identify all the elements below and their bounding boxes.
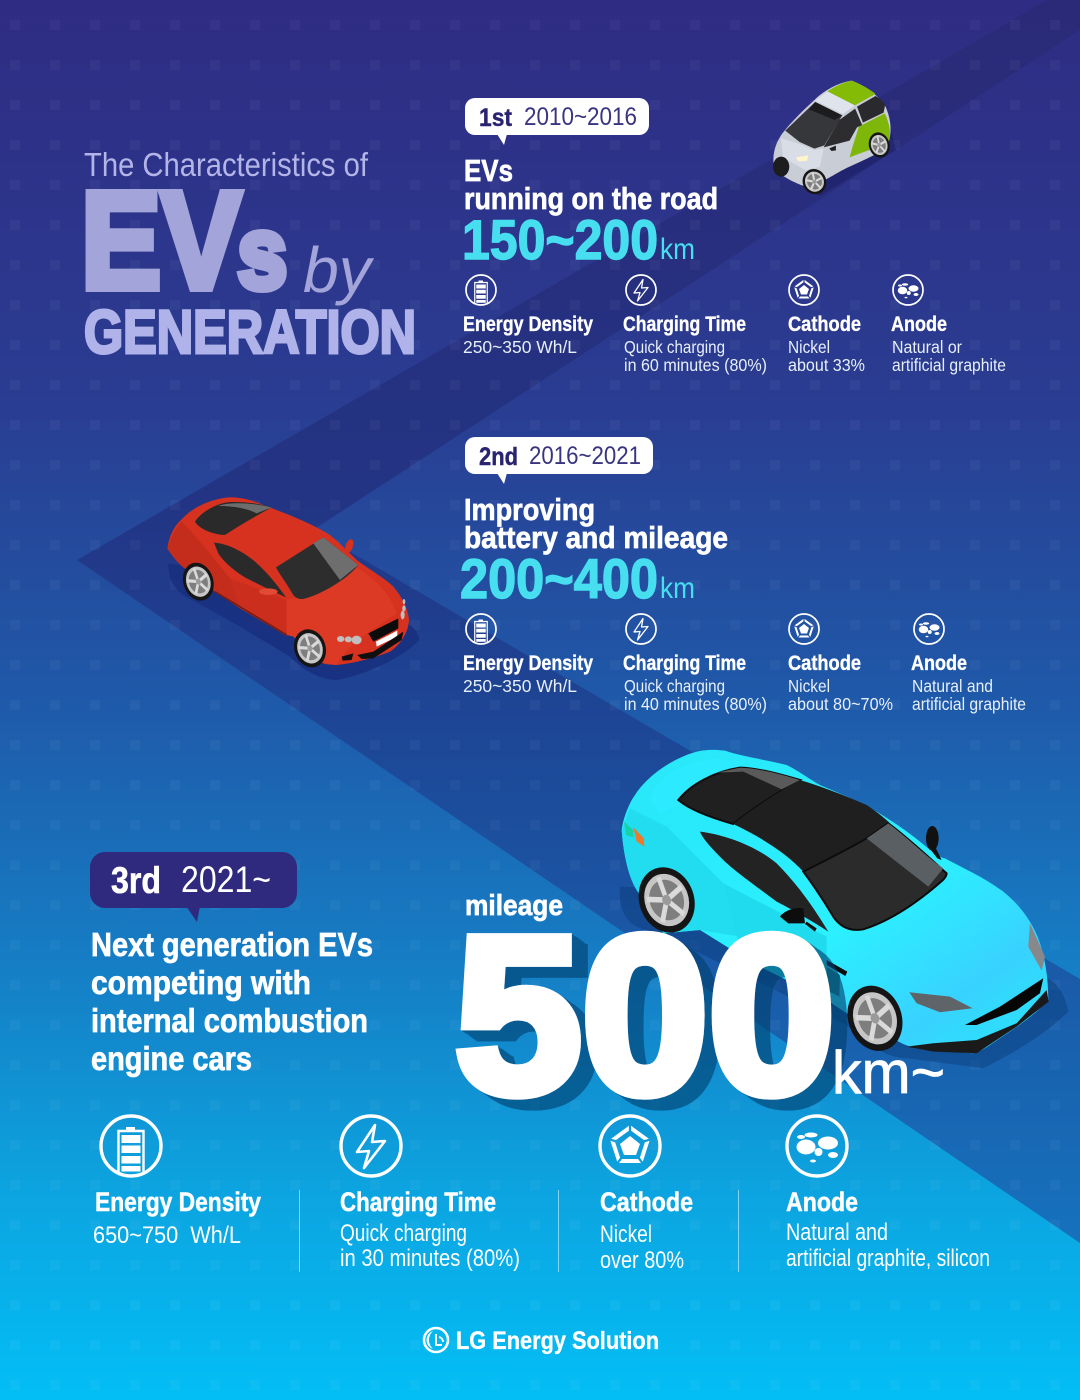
speech bubble: 3rd 2021~: 2021~ [181,859,271,900]
spec: charging time: in 40 minutes (80%) [624,694,767,714]
spec: cathode [788,313,865,375]
logo: LG Energy Solution: LG Energy Solution [456,1327,659,1355]
spec: cathode: Nickel [600,1221,652,1248]
spec: charging time: Charging Time [340,1187,496,1217]
speech bubble: 1st 2010~2016: 1st [479,104,513,132]
icon: pentagon cathode [600,1116,660,1176]
spec: anode [786,1187,990,1272]
spec: anode: Anode [891,313,947,336]
icon: battery [101,1116,161,1176]
spec: cathode: over 80% [600,1247,684,1274]
spec: energy density: Energy Density [463,652,593,675]
spec: charging time: Charging Time [623,652,746,675]
spec: anode: Anode [911,652,967,675]
spec: charging time: in 60 minutes (80%) [624,355,767,375]
heading: running on the road [464,181,718,216]
spec: energy density: 250~350 Wh/L [463,337,577,357]
spec: anode: Natural and [786,1219,888,1246]
logo mark [424,1328,448,1352]
heading: internal combustion [91,1002,368,1039]
panel: 2nd generation [460,437,1026,714]
spec: charging time: in 30 minutes (80%) [340,1245,520,1272]
spec: cathode [600,1187,693,1274]
title: by: by [303,234,375,306]
spec: anode: artificial graphite, silicon [786,1245,990,1272]
icon: graphite anode [787,1116,847,1176]
illustration: small green and silver city car [773,81,896,196]
title: EVs: EV [81,164,241,318]
spec: cathode: Nickel [788,337,830,357]
spec: cathode: Cathode [600,1187,693,1217]
heading: battery and mileage [464,520,728,555]
heading: engine cars [91,1040,252,1077]
speech bubble: 3rd 2021~: 3rd [111,860,161,901]
title: EVs: s [238,196,287,310]
spec: charging time [340,1187,520,1272]
panel: 3rd generation [90,852,990,1274]
spec: anode: Natural or [892,337,962,357]
panel: 1st generation [462,98,1006,375]
big number: 500: 500 [455,891,835,1140]
spec: energy density [93,1187,261,1249]
spec: charging time [623,652,767,714]
heading: Next generation EVs [91,926,373,963]
mileage figure: km [660,572,695,605]
unit: km~: km~ [832,1039,945,1106]
spec: anode [911,652,1026,714]
spec: charging time: Quick charging [340,1220,467,1247]
icon: battery [466,614,496,644]
heading: EVs [464,153,513,188]
heading [464,492,728,555]
spec: cathode: Cathode [788,313,861,336]
spec: cathode: Nickel [788,676,830,696]
illustration: red coupe [167,497,419,680]
title line: The Characteristics of: The Characteristics of [84,146,369,183]
spec: anode [891,313,1006,375]
speech bubble: 1st 2010~2016 [465,98,649,145]
spec: cathode: Cathode [788,652,861,675]
speech bubble: 2nd 2016~2021 [465,437,653,484]
spec: charging time: Quick charging [624,676,725,696]
icon: lightning bolt [341,1116,401,1176]
heading [91,926,373,1077]
spec: energy density: Energy Density [95,1187,261,1217]
speech bubble: 3rd 2021~ [90,852,297,922]
icon: pentagon cathode [789,275,819,305]
spec: anode: artificial graphite [912,694,1026,714]
speech bubble: 2nd 2016~2021: 2016~2021 [529,442,641,470]
icon: graphite anode [893,275,923,305]
icon: battery [466,275,496,305]
heading: competing with [91,964,311,1001]
spec: cathode: about 80~70% [788,694,893,714]
spec: cathode: about 33% [788,355,865,375]
spec: charging time: Charging Time [623,313,746,336]
title [81,146,416,366]
spec: energy density [463,313,593,357]
spec: anode: Anode [786,1187,858,1217]
heading: Improving [464,492,595,527]
icon: pentagon cathode [789,614,819,644]
spec: energy density: Energy Density [463,313,593,336]
illustration: cyan sports car [620,750,1068,1068]
spec: charging time [623,313,767,375]
mileage figure: km [660,233,695,266]
heading [464,153,718,216]
speech bubble: 2nd 2016~2021: 2nd [479,443,518,471]
spec: anode: Natural and [912,676,993,696]
spec: energy density [463,652,593,696]
mileage figure: 200~400 [460,547,658,610]
spec: energy density: 250~350 Wh/L [463,676,577,696]
spec: cathode [788,652,893,714]
mileage figure: 150~200 [462,208,658,271]
mileage label: mileage [465,890,563,922]
spec: anode: artificial graphite [892,355,1006,375]
spec: energy density: 650~750 Wh/L [93,1222,241,1249]
speech bubble: 1st 2010~2016: 2010~2016 [524,103,637,131]
icon: lightning bolt [626,614,656,644]
title: GENERATION: GENERATION [84,298,416,366]
icon: lightning bolt [626,275,656,305]
icon: graphite anode [914,614,944,644]
spec: charging time: Quick charging [624,337,725,357]
